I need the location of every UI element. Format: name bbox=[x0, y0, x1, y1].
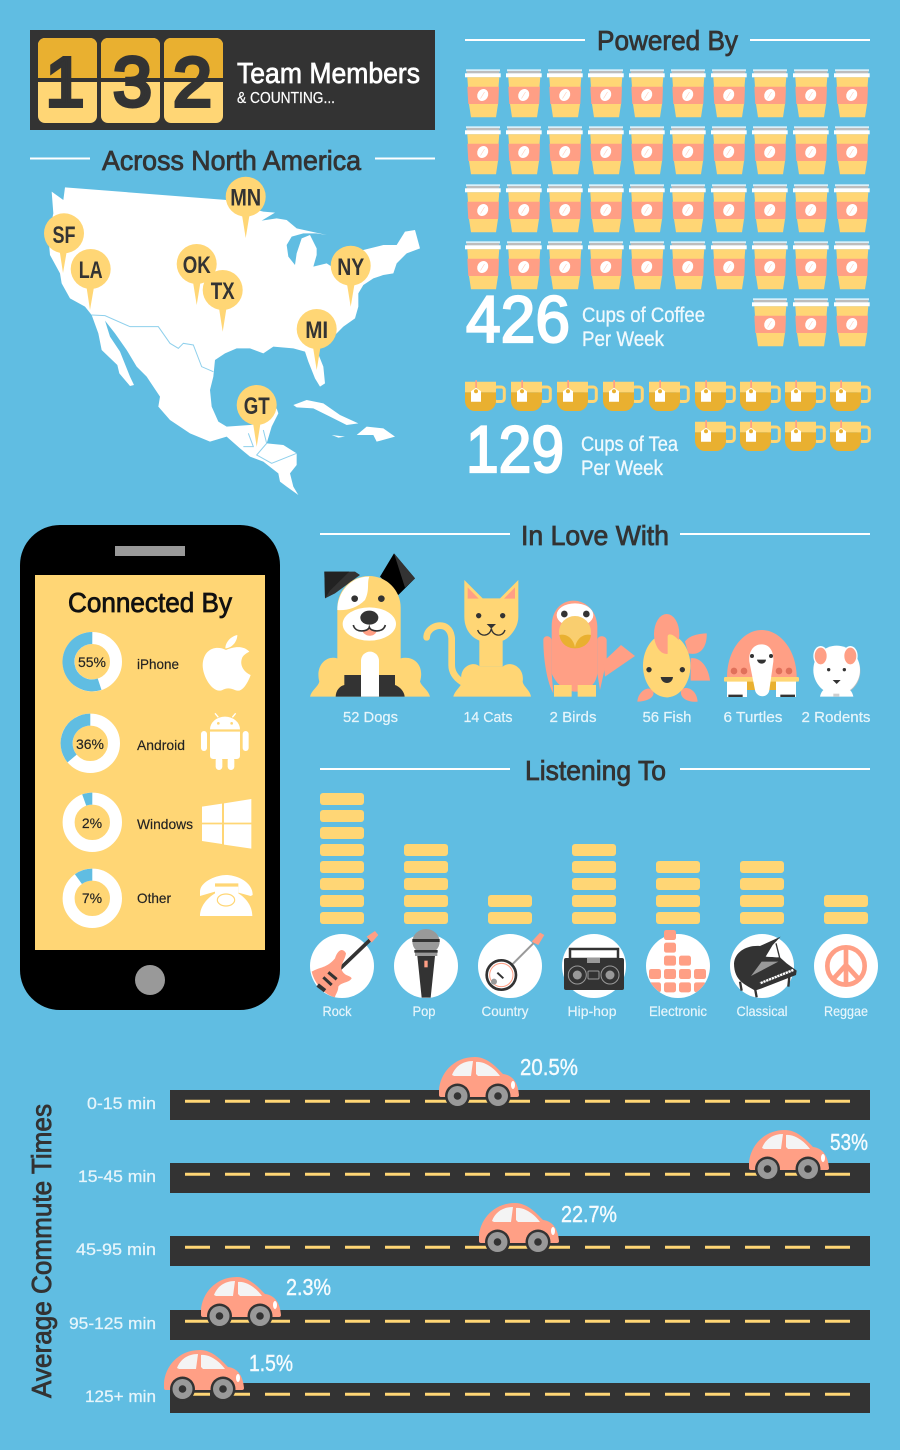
icon: banjo bbox=[478, 933, 544, 998]
commute row: 15-45 min: 53% bbox=[830, 1129, 868, 1155]
coffee stat: 426 bbox=[466, 282, 570, 356]
heading: Powered By: Powered By bbox=[597, 25, 738, 56]
counter label: Team Members bbox=[237, 58, 420, 90]
commute row: 0-15 min bbox=[87, 1054, 870, 1120]
pet labels: 52 Dogs bbox=[343, 709, 398, 726]
donut: iPhone 55%: 55% bbox=[78, 654, 106, 670]
music labels: Hip-hop bbox=[568, 1003, 617, 1019]
donut: Android 36% bbox=[67, 720, 185, 767]
icon: grand piano bbox=[730, 934, 797, 998]
pin: NY bbox=[331, 246, 371, 307]
icon: telephone bbox=[200, 875, 253, 916]
pet labels bbox=[343, 709, 870, 726]
heading: Average Commute Times: Average Commute Times bbox=[26, 1104, 57, 1398]
flip-digit tiles: 1 bbox=[46, 43, 84, 121]
coffee cups grid bbox=[465, 69, 870, 346]
commute row: 125+ min: 1.5% bbox=[249, 1350, 293, 1376]
icon: peace sign bbox=[814, 934, 878, 998]
donut: Android 36%: Android bbox=[137, 737, 185, 753]
commute row: 0-15 min: 0-15 min bbox=[87, 1094, 156, 1113]
pin: TX: TX bbox=[211, 278, 235, 305]
donut: Windows 2%: Windows bbox=[137, 816, 193, 832]
flip-digit tiles: 2 bbox=[173, 43, 212, 121]
pin: SF bbox=[44, 213, 84, 273]
bar: Hip-hop bbox=[572, 844, 616, 924]
pin: MN bbox=[226, 177, 266, 238]
commute row: 15-45 min bbox=[78, 1129, 870, 1193]
commute row: 45-95 min: 45-95 min bbox=[76, 1240, 156, 1259]
bar: Electronic bbox=[656, 861, 700, 924]
icon: boombox bbox=[562, 934, 626, 998]
icon: windows bbox=[202, 799, 251, 849]
donut: iPhone 55% bbox=[68, 638, 179, 685]
map of North America bbox=[48, 187, 420, 495]
coffee stat bbox=[466, 282, 705, 356]
music labels: Electronic bbox=[649, 1003, 707, 1019]
donut: Windows 2% bbox=[69, 799, 193, 846]
bar: Classical bbox=[740, 861, 784, 924]
pet labels: 2 Birds bbox=[550, 709, 596, 726]
icon: dog bbox=[310, 553, 430, 697]
counter sublabel: & COUNTING... bbox=[237, 90, 335, 107]
tea stat: Cups of Tea bbox=[581, 433, 678, 456]
commute row: 125+ min: 125+ min bbox=[85, 1387, 156, 1406]
map pins bbox=[44, 177, 371, 447]
pin: OK bbox=[177, 244, 217, 305]
donut: iPhone 55%: iPhone bbox=[137, 656, 179, 672]
pet labels: 6 Turtles bbox=[724, 709, 782, 726]
commute row: 0-15 min: 20.5% bbox=[520, 1054, 578, 1080]
donut: Other 7% bbox=[69, 875, 171, 922]
coffee stat: Per Week bbox=[582, 328, 664, 351]
pet labels: 56 Fish bbox=[642, 709, 692, 726]
tea stat: Per Week bbox=[581, 457, 663, 480]
bar: Rock bbox=[320, 793, 364, 924]
pin: LA bbox=[71, 249, 111, 310]
pin: SF: SF bbox=[52, 222, 76, 249]
music labels: Country bbox=[482, 1003, 528, 1019]
commute row: 45-95 min bbox=[76, 1201, 870, 1266]
tea stat: 129 bbox=[466, 412, 564, 486]
music labels bbox=[322, 1003, 868, 1019]
icon: electronic equalizer bbox=[646, 930, 710, 998]
pin: GT: GT bbox=[244, 393, 270, 420]
heading: Across North America: Across North America bbox=[102, 145, 361, 176]
pets illustration group bbox=[310, 553, 860, 702]
music labels: Pop bbox=[412, 1003, 436, 1019]
flip-digit tiles: 3 bbox=[113, 43, 152, 121]
commute row: 95-125 min: 95-125 min bbox=[69, 1314, 156, 1333]
pet labels: 14 Cats bbox=[464, 709, 512, 726]
pin: MI: MI bbox=[305, 317, 328, 344]
tea stat bbox=[466, 412, 678, 486]
heading: Connected By: Connected By bbox=[68, 587, 232, 618]
commute row: 125+ min bbox=[85, 1350, 870, 1413]
flip-digit tiles bbox=[38, 38, 223, 123]
bar: Country bbox=[488, 895, 532, 924]
pin: MN: MN bbox=[230, 184, 261, 212]
donut: Android 36%: 36% bbox=[76, 736, 104, 752]
music labels: Rock bbox=[322, 1003, 352, 1019]
coffee stat: Cups of Coffee bbox=[582, 304, 705, 327]
music bar chart bbox=[320, 793, 868, 924]
icon: microphone bbox=[394, 929, 458, 998]
tea mugs bbox=[465, 380, 869, 451]
icon: apple bbox=[203, 635, 251, 691]
heading: In Love With: In Love With bbox=[521, 520, 669, 551]
music labels: Reggae bbox=[824, 1003, 868, 1019]
pin: MI bbox=[297, 309, 337, 370]
donut: Windows 2%: 2% bbox=[82, 815, 102, 831]
commute row: 15-45 min: 15-45 min bbox=[78, 1167, 156, 1186]
donut: Other 7%: Other bbox=[137, 890, 171, 906]
donut: Other 7%: 7% bbox=[82, 890, 102, 906]
pin: TX bbox=[203, 270, 243, 332]
icon: cat bbox=[427, 580, 531, 697]
music labels: Classical bbox=[736, 1003, 788, 1019]
commute row: 95-125 min: 2.3% bbox=[286, 1274, 331, 1300]
icon: guitar bbox=[310, 931, 378, 998]
pet labels: 2 Rodents bbox=[802, 709, 870, 726]
icon: rodent bbox=[813, 646, 860, 697]
pin: GT bbox=[237, 385, 277, 447]
bar: Pop bbox=[404, 844, 448, 924]
icon: android bbox=[201, 713, 249, 770]
pin: OK: OK bbox=[183, 252, 211, 279]
commute row: 95-125 min bbox=[69, 1274, 870, 1340]
pin: LA: LA bbox=[79, 257, 103, 284]
icon: fish bbox=[637, 614, 710, 702]
commute row: 45-95 min: 22.7% bbox=[561, 1201, 617, 1227]
panel: phone connected by bbox=[20, 525, 280, 1010]
panel: team members counter bbox=[30, 30, 435, 130]
icon: turtle bbox=[724, 630, 799, 697]
heading: Listening To: Listening To bbox=[525, 755, 666, 786]
bar: Reggae bbox=[824, 895, 868, 924]
icon: bird bbox=[543, 601, 635, 697]
pin: NY: NY bbox=[337, 254, 364, 281]
